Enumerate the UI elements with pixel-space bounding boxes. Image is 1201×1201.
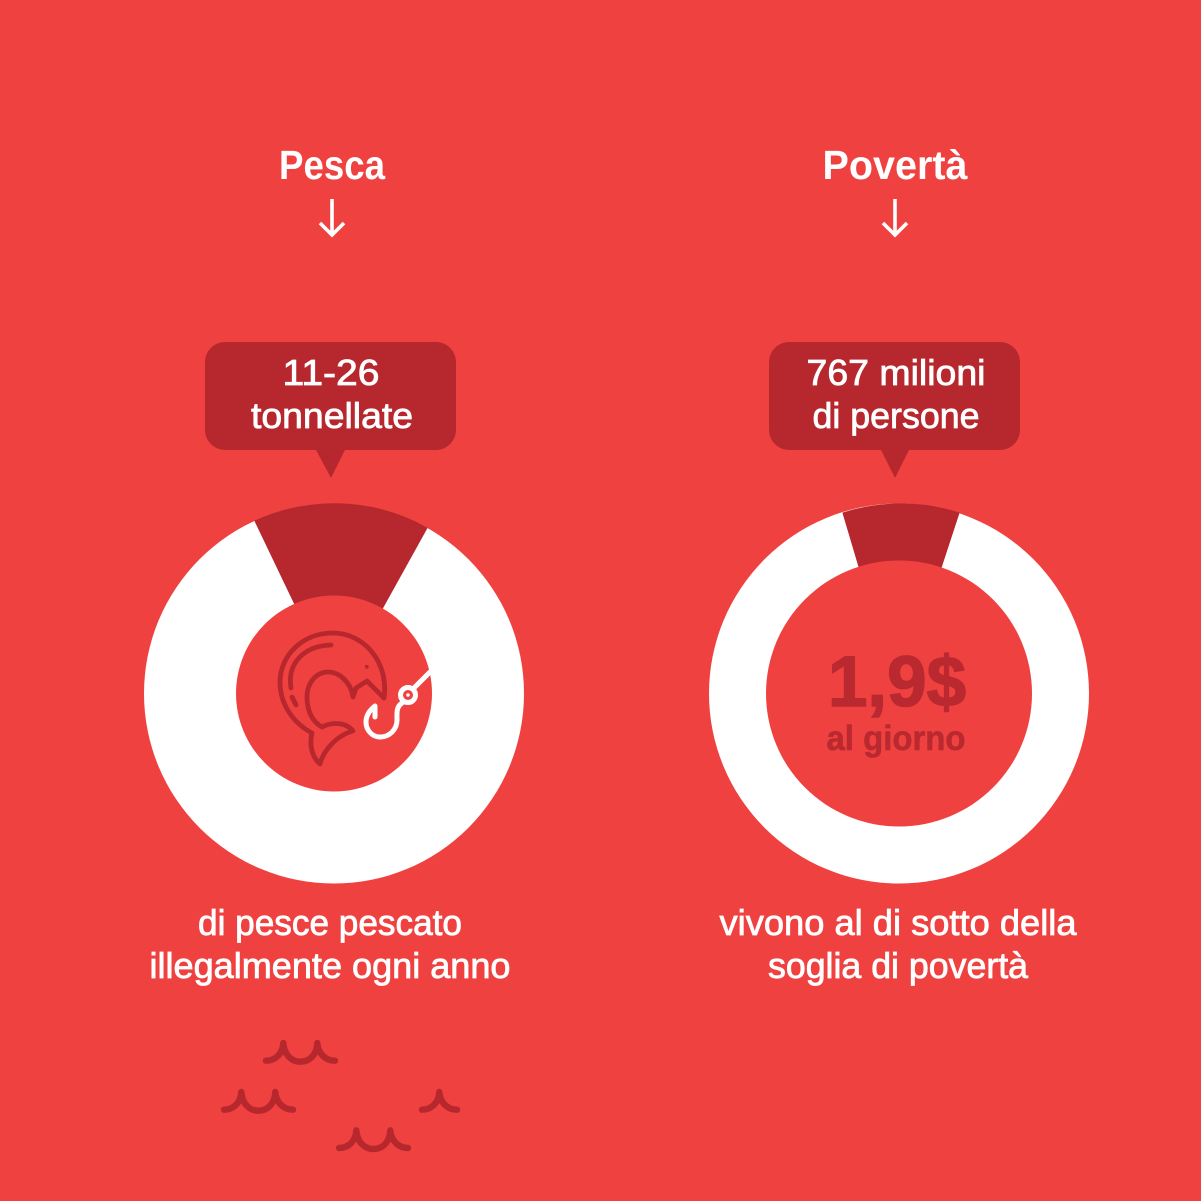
callout: 767 milioni di persone: di persone: [812, 395, 980, 436]
wave 3: [422, 1092, 457, 1110]
center value: 1,9$ al giorno: [826, 643, 966, 758]
arrow: Pesca down: [320, 199, 344, 235]
wave 4: [339, 1130, 408, 1149]
callout: 11-26 tonnellate: 11-26: [282, 352, 380, 393]
caption: Povertà: vivono al di sotto della: [720, 902, 1077, 943]
caption: Povertà: [720, 902, 1077, 986]
heading: Pesca: Pesca: [279, 142, 386, 188]
callout: 11-26 tonnellate: tonnellate: [251, 395, 413, 436]
center value: 1,9$ al giorno: 1,9$: [828, 643, 966, 722]
icon: fishing hook: [366, 672, 430, 737]
panel: Pesca: [144, 142, 524, 986]
wave 2: [224, 1092, 293, 1111]
icon: fish: [280, 633, 385, 764]
center value: 1,9$ al giorno: al giorno: [826, 719, 966, 758]
callout: 11-26 tonnellate: [205, 342, 456, 478]
callout: 767 milioni di persone: [769, 342, 1020, 478]
caption: Pesca: illegalmente ogni anno: [150, 945, 511, 986]
caption: Povertà: soglia di povertà: [768, 945, 1029, 986]
panel: Povertà: [709, 142, 1089, 986]
wave 1: [266, 1043, 335, 1062]
donut chart: Pesca: [144, 504, 524, 884]
decoration: waves: [224, 1043, 457, 1149]
donut chart: Povertà: [709, 504, 1089, 884]
caption: Pesca: [150, 902, 511, 986]
caption: Pesca: di pesce pescato: [198, 902, 462, 943]
arrow: Povertà down: [883, 199, 907, 235]
heading: Povertà: Povertà: [822, 142, 968, 188]
callout: 767 milioni di persone: 767 milioni: [806, 352, 986, 393]
